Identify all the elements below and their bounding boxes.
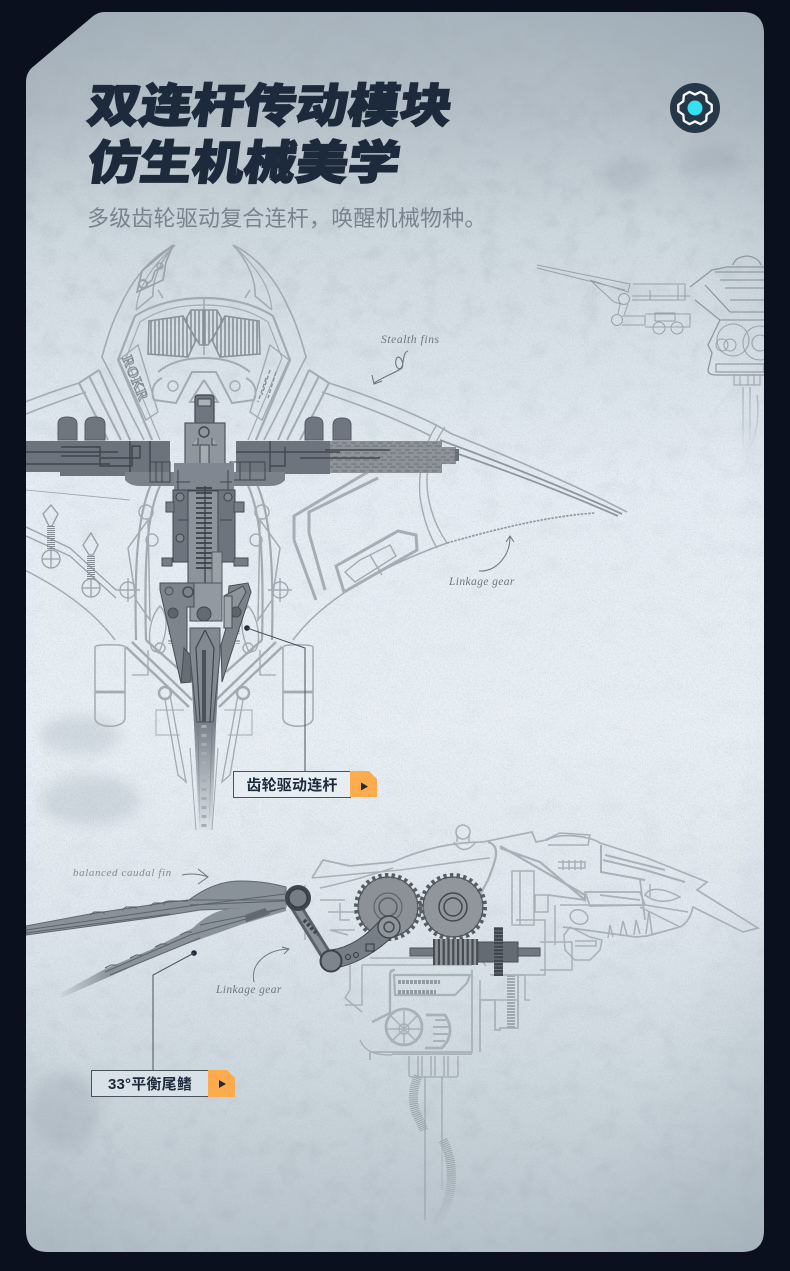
- callout: balanced tail fin: 33°平衡尾鳍: [108, 1075, 192, 1093]
- line art: worm tail: [413, 1076, 451, 1228]
- line art: right wing detail: [258, 370, 622, 600]
- line art: right half of manta: [204, 245, 627, 830]
- annotation: linkage gear lower: [215, 947, 289, 996]
- arrow: linkage gear lower: [253, 947, 289, 982]
- gear right: [422, 876, 484, 938]
- crank arm: [330, 918, 396, 968]
- annotation: linkage gear upper: [448, 536, 515, 588]
- mechanism: arrowhead fins: [160, 583, 251, 683]
- title: [85, 81, 456, 189]
- mechanism: tail fins: [26, 881, 286, 998]
- arrow: caudal fin: [182, 869, 208, 884]
- arrow: stealth fins: [372, 351, 408, 384]
- gear left: [356, 876, 420, 938]
- callout: balanced tail fin: [92, 950, 235, 1097]
- worm shaft: [410, 948, 540, 956]
- annotation: caudal fin: [73, 867, 208, 884]
- subtitle: 多级齿轮驱动复合连杆，唤醒机械物种。: [87, 206, 487, 231]
- annotation: stealth fins: [372, 334, 440, 384]
- icon: gear badge: [670, 83, 720, 133]
- annotation: linkage gear lower: Linkage gear: [215, 984, 282, 996]
- line art: left side detail: [26, 245, 173, 598]
- arrow: linkage gear upper: [479, 536, 514, 571]
- annotation: linkage gear upper: Linkage gear: [448, 576, 515, 588]
- mechanism: central column: [162, 395, 248, 621]
- mechanism: crank and gears: [285, 876, 540, 976]
- callout: gear drive linkage: 齿轮驱动连杆: [246, 776, 338, 794]
- annotation: caudal fin: balanced caudal fin: [73, 867, 172, 879]
- annotation: stealth fins: Stealth fins: [381, 334, 440, 346]
- label: ROKR emblem: ROKR: [118, 354, 151, 403]
- title: 仿生机械美学: [85, 138, 404, 189]
- mechanism: central spike: [190, 628, 220, 835]
- mechanism: horizontal drive bar: [26, 417, 459, 486]
- line art: mirrored left half of manta: [26, 244, 205, 830]
- illustration: side view line art body: [305, 825, 758, 1077]
- callout: gear drive linkage: [234, 625, 377, 798]
- illustration: small side view top right: [537, 256, 777, 455]
- illustration: top view manta mechanism: [0, 245, 627, 835]
- title: 双连杆传动模块: [85, 81, 456, 132]
